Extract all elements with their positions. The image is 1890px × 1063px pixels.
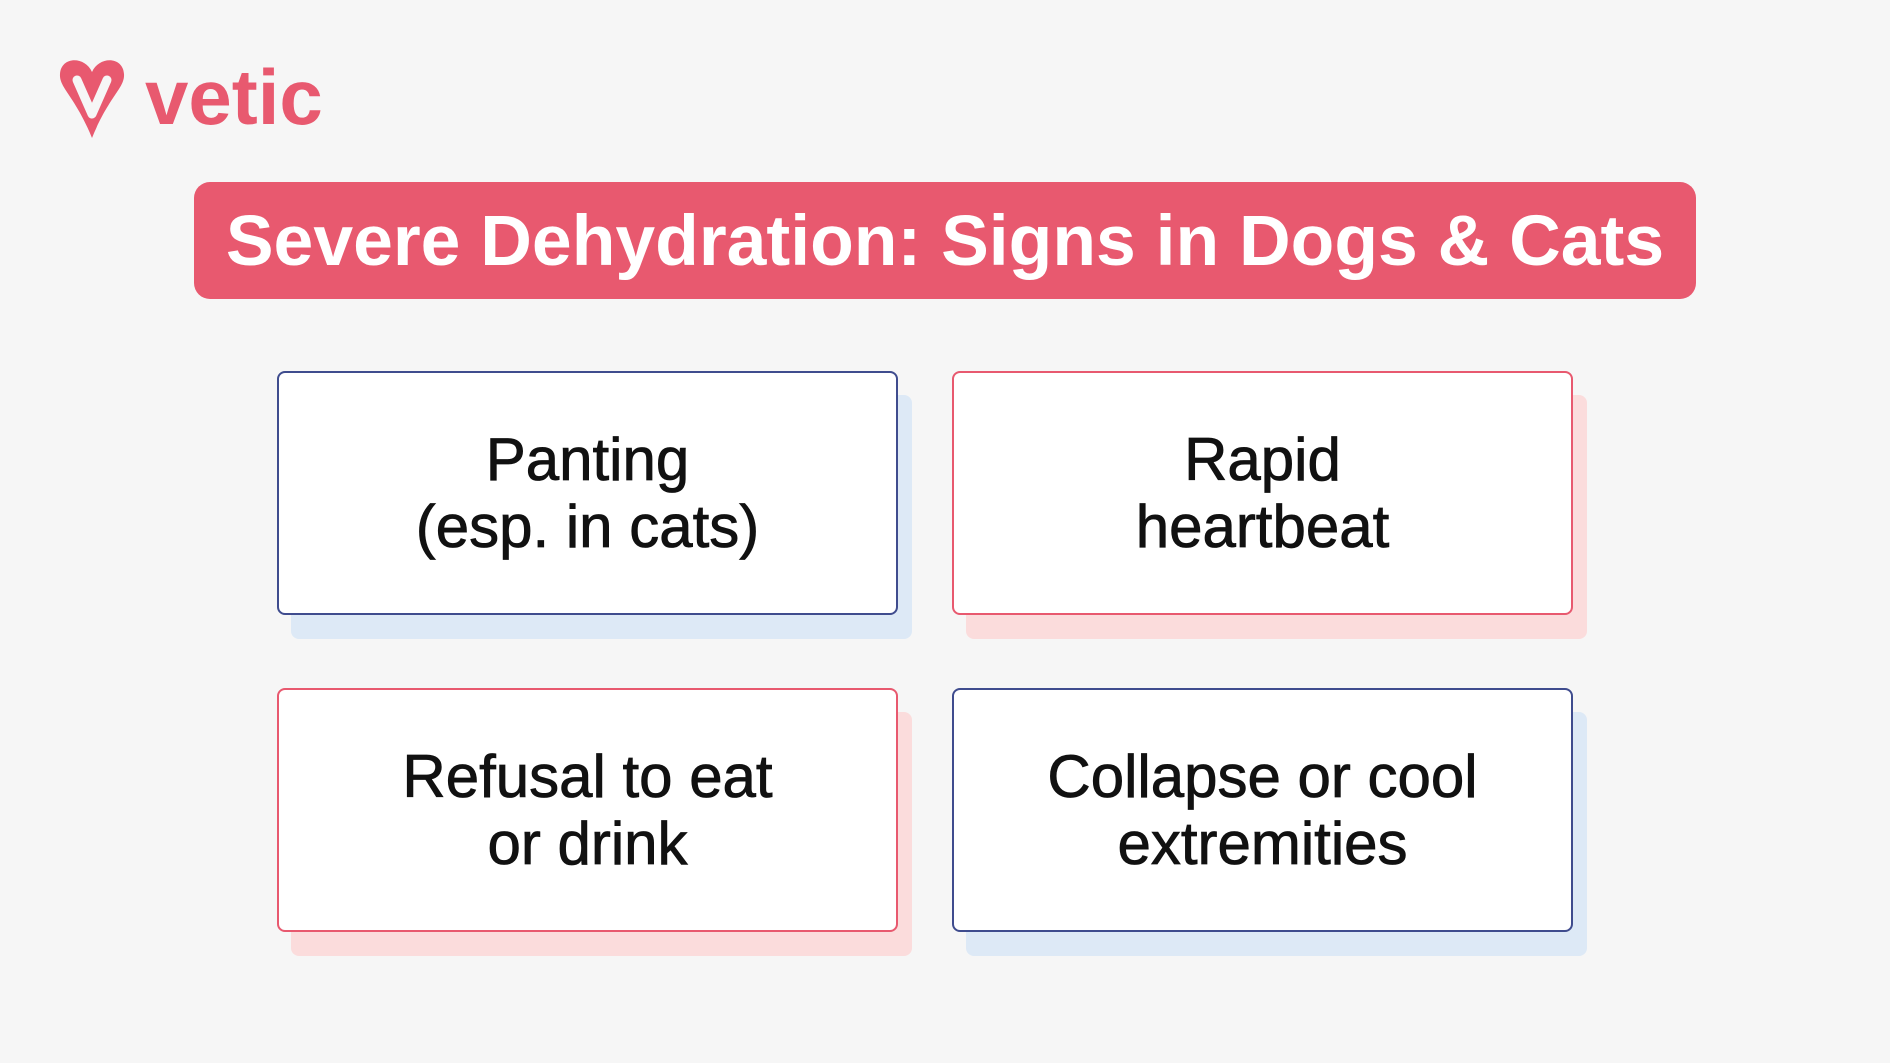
- card: collapse: Collapse or cool: [1047, 743, 1478, 810]
- logo: [60, 53, 323, 141]
- card: panting: Panting: [486, 426, 689, 493]
- card: collapse: [952, 688, 1587, 956]
- brand name: vetic: [145, 53, 323, 141]
- card: rapid heartbeat: heartbeat: [1136, 493, 1389, 560]
- title banner: Severe Dehydration: Signs in Dogs & Cats: [226, 200, 1664, 280]
- title banner: [194, 182, 1696, 299]
- card: collapse: extremities: [1117, 810, 1408, 877]
- card: rapid heartbeat: [952, 371, 1587, 639]
- card: refusal to eat: or drink: [487, 810, 688, 877]
- card: panting: [277, 371, 912, 639]
- icon: heart: [60, 60, 124, 138]
- card: refusal to eat: Refusal to eat: [402, 743, 773, 810]
- card: refusal to eat: [277, 688, 912, 956]
- card: rapid heartbeat: Rapid: [1184, 426, 1341, 493]
- card: panting: (esp. in cats): [416, 493, 759, 560]
